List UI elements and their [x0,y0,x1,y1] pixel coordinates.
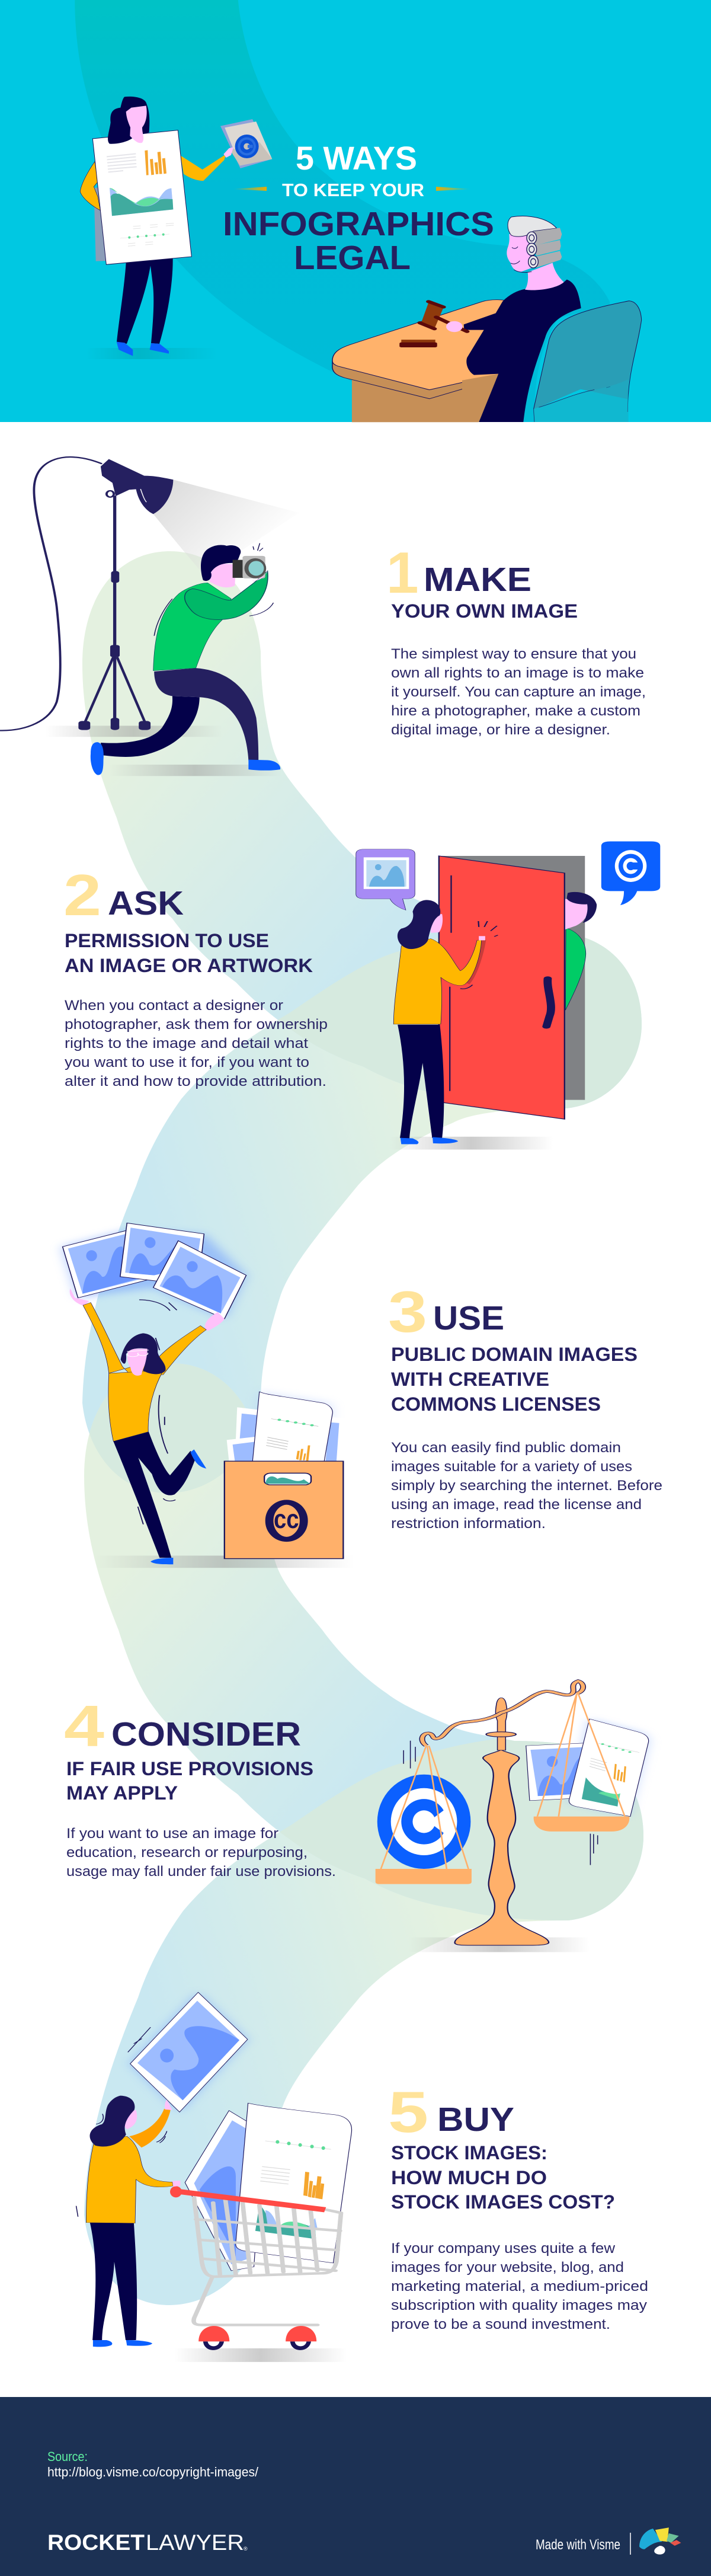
background ribbon swirl [82,551,643,2305]
heading and body [63,862,328,1089]
heading and body: images for your website, blog, and [391,2259,624,2275]
heading and body: digital image, or hire a designer. [391,722,610,738]
title: 5 WAYS [296,139,417,177]
rocket lawyer logo: ROCKET [47,2530,145,2555]
heading and body: CONSIDER [111,1715,301,1753]
heading and body: STOCK IMAGES COST? [391,2191,615,2213]
heading and body: When you contact a designer or [65,998,283,1014]
section 3: use public domain images [63,1223,662,1568]
heading and body: images suitable for a variety of uses [391,1459,632,1475]
section 2: ask permission [63,842,660,1149]
heading and body: education, research or repurposing, [66,1845,308,1861]
heading and body: it yourself. You can capture an image, [391,684,646,700]
heading and body: restriction information. [391,1516,546,1532]
heading and body: subscription with quality images may [391,2297,647,2313]
heading and body: simply by searching the internet. Before [391,1478,662,1494]
heading and body: AN IMAGE OR ARTWORK [65,955,313,976]
cc logo text: cc [274,1504,299,1534]
header background swirl [75,0,610,422]
desk [332,300,513,422]
visme logo [639,2527,681,2555]
cart [194,2197,341,2325]
title: TO KEEP YOUR [282,180,424,200]
scale body [455,1750,549,1945]
heading and body: PERMISSION TO USE [65,930,269,951]
woman wearing infographic board [80,97,272,359]
source [47,2449,259,2479]
heading and body: using an image, read the license and [391,1497,642,1513]
heading and body [388,2079,648,2332]
floating photo [130,1992,248,2112]
source: http://blog.visme.co/copyright-images/ [47,2465,259,2479]
heading and body: alter it and how to provide attribution. [65,1073,326,1089]
heading and body: hire a photographer, make a custom [391,703,640,719]
heading and body: PUBLIC DOMAIN IMAGES [391,1344,638,1365]
heading and body: prove to be a sound investment. [391,2316,610,2332]
heading and body: COMMONS LICENSES [391,1394,601,1415]
heading and body: 4 [64,1693,104,1759]
rocket lawyer logo: ® [244,2546,248,2552]
heading and body: You can easily find public domain [391,1440,621,1456]
made with visme: Made with Visme [536,2537,620,2553]
illustration: woman knocking on door [356,842,660,1149]
heading and body: WITH CREATIVE [391,1369,549,1390]
right pan items [526,1719,649,1817]
documents and cc box [225,1392,345,1559]
gavel [420,302,467,332]
cart wheels [198,2326,316,2350]
heading and body [64,1693,336,1880]
photo three [153,1241,246,1319]
title [223,139,494,277]
section 5: buy stock images [76,1992,648,2362]
illustration: photographer and studio lamp [0,457,299,776]
illustration: woman holding photos and cc box [63,1223,354,1568]
judge at desk with gavel [332,216,642,422]
chair and judge figure [462,216,642,422]
made with visme [536,2527,681,2555]
heading and body: 1 [386,540,419,605]
heading and body: BUY [437,2101,514,2139]
photo one [63,1231,150,1298]
copyright symbol on left pan [377,1775,470,1869]
heading and body: USE [433,1299,504,1337]
heading and body: The simplest way to ensure that you [391,646,636,662]
heading and body: 3 [388,1279,427,1344]
woman [86,2096,181,2347]
source: Source: [47,2449,88,2464]
heading and body: IF FAIR USE PROVISIONS [66,1758,313,1779]
heading and body: ASK [108,884,184,922]
rocket lawyer logo [47,2530,248,2555]
footer [0,2397,711,2576]
heading and body: marketing material, a medium-priced [391,2278,648,2294]
title: LEGAL [294,239,411,277]
heading and body: usage may fall under fair use provisions. [66,1864,336,1880]
speech bubble: image [356,849,415,910]
heading and body: STOCK IMAGES: [391,2142,547,2163]
header panel [0,0,711,422]
heading and body: If your company uses quite a few [391,2241,616,2257]
illustration: woman with shopping cart [76,1992,352,2362]
heading and body: 2 [63,862,101,928]
big photo and document in cart [185,2103,352,2271]
heading and body [388,1279,662,1532]
illustration: balance scale [376,1681,649,1952]
heading and body: If you want to use an image for [66,1826,278,1842]
section 1: make your own image [0,457,646,776]
heading and body: rights to the image and detail what [65,1035,308,1052]
heading and body: HOW MUCH DO [391,2167,547,2188]
heading and body: photographer, ask them for ownership [65,1017,328,1033]
heading and body: own all rights to an image is to make [391,665,644,681]
heading and body: 5 [388,2079,428,2144]
heading and body: you want to use it for, if you want to [65,1054,309,1070]
title: INFOGRAPHICS [223,205,494,243]
heading and body [386,540,646,738]
heading and body: MAY APPLY [66,1782,178,1804]
photo two [120,1223,204,1281]
heading and body: YOUR OWN IMAGE [391,600,578,622]
rocket lawyer logo: LAWYER [146,2530,244,2555]
heading and body: MAKE [424,561,531,599]
speech bubble: copyright [601,842,660,905]
section 4: consider fair use [64,1681,649,1952]
